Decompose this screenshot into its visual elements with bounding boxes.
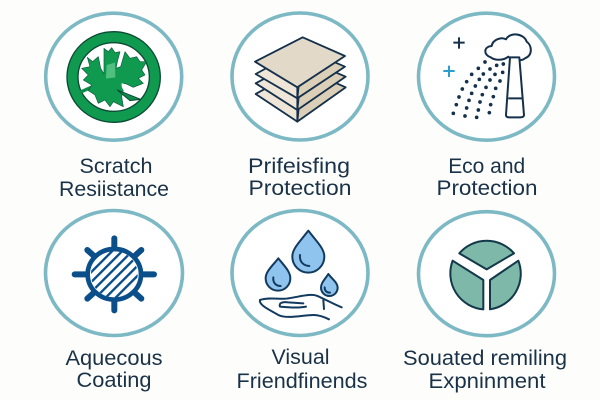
icon: water drops over a hand: [260, 231, 342, 319]
label: Aquecous: [66, 346, 162, 370]
icon: hatched wheel: [75, 238, 154, 310]
panel: visual friendfinends: [232, 210, 368, 393]
icon: stacked sheets: [255, 37, 346, 122]
icon: three-part circle: [450, 241, 521, 309]
label: Souated remiling: [403, 346, 567, 370]
label: [436, 154, 538, 200]
icon: smokestack with cloud and spray: [443, 34, 531, 119]
ring: [418, 13, 554, 140]
label: [403, 346, 567, 393]
panel: prifeisfing protection: [232, 13, 368, 200]
label: Scratch: [80, 154, 152, 178]
label: Protection: [436, 176, 538, 200]
label: [248, 154, 352, 200]
panel: scratch resistance: [46, 13, 182, 201]
panel: aquecous coating: [46, 210, 182, 392]
ring: [232, 13, 368, 140]
label: Friendfinends: [236, 369, 368, 393]
label: Visual: [272, 345, 330, 369]
ring: [46, 210, 182, 336]
panel: souated remiling expninment: [403, 212, 567, 393]
ring: [46, 13, 182, 140]
label: Prifeisfing: [248, 154, 350, 178]
ring: [418, 212, 554, 336]
label: Expninment: [428, 369, 546, 393]
label: Protection: [248, 176, 352, 200]
label: Eco and: [448, 154, 525, 178]
ring: [232, 210, 368, 336]
label: Resiistance: [59, 177, 169, 201]
label: [66, 346, 162, 392]
label: [59, 154, 169, 201]
label: Coating: [76, 368, 152, 392]
label: [236, 345, 368, 393]
icon: green leaf in a prohibition ring: [67, 32, 160, 122]
panel: eco and protection: [418, 13, 554, 200]
